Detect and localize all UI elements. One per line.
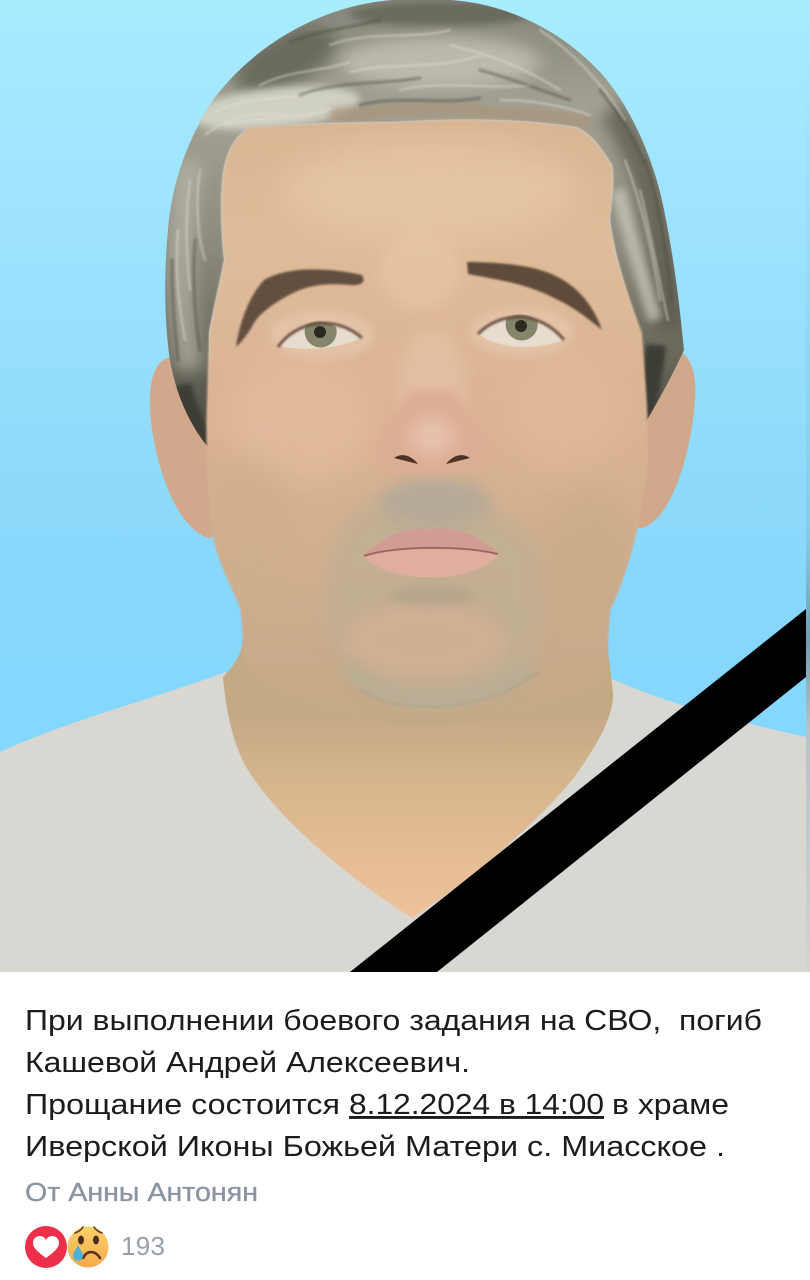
pupil — [515, 320, 527, 332]
line 2: Кашевой Андрей Алексеевич. — [25, 1047, 470, 1079]
right ear — [636, 353, 696, 528]
hair base — [150, 0, 700, 455]
shirt — [0, 672, 810, 972]
reaction count: 193 — [121, 1231, 165, 1261]
emoji face — [68, 1226, 108, 1268]
icon: crying emoji — [68, 1226, 108, 1268]
left nostril — [394, 455, 418, 464]
dark hair strands — [172, 20, 672, 360]
right eye — [93, 1236, 99, 1244]
chin stubble band — [345, 665, 530, 699]
left eyebrow — [236, 269, 364, 347]
under lip shadow — [394, 588, 470, 606]
face — [204, 118, 649, 654]
upper lid — [278, 323, 362, 347]
light top band — [340, 36, 540, 88]
neck — [223, 640, 613, 918]
dark crown top — [350, 2, 530, 26]
author: От Анны Антонян — [25, 1179, 258, 1207]
reactions row — [25, 1226, 165, 1268]
left ear — [150, 357, 219, 538]
lips — [362, 528, 500, 577]
chin pad — [345, 604, 505, 676]
dark crown left — [228, 21, 342, 94]
right eye — [470, 308, 574, 356]
white heart — [33, 1236, 59, 1258]
blue studio background — [0, 0, 810, 972]
face shading — [210, 140, 640, 710]
lower lip — [362, 548, 500, 577]
chin edge — [363, 672, 539, 700]
brown hairline tint — [330, 111, 590, 122]
right jaw tan — [564, 511, 638, 634]
nose — [376, 330, 488, 475]
mouth line — [364, 548, 498, 556]
left side grey — [182, 160, 190, 370]
line 1: При выполнении боевого задания на СВО, погиб — [25, 1005, 762, 1037]
right side light streak — [618, 190, 655, 320]
left eye — [270, 311, 374, 359]
right cheek light — [505, 350, 625, 470]
stubble area — [330, 500, 538, 690]
eye socket highlight — [470, 308, 574, 356]
light hair strands — [177, 30, 668, 340]
date and time: 8.12.2024 в 14:00 — [349, 1089, 604, 1121]
nose tip light — [410, 416, 454, 456]
upper lip — [362, 528, 500, 556]
left cheek light — [254, 434, 342, 458]
eye white — [478, 319, 564, 347]
white left front — [198, 82, 362, 134]
mouth — [83, 1252, 100, 1258]
nose bridge light — [400, 330, 464, 450]
right lower dark — [636, 345, 656, 445]
brow bridge light — [386, 243, 454, 305]
forehead light — [297, 145, 564, 228]
left jaw tan — [213, 535, 240, 605]
line 3 end: в храме — [612, 1089, 729, 1121]
portrait photo — [0, 0, 810, 972]
left eyebrow — [75, 1227, 83, 1233]
left eye — [78, 1236, 84, 1244]
red circle — [25, 1226, 67, 1268]
left lower dark — [182, 385, 208, 450]
hair — [150, 0, 700, 455]
right edge strip — [806, 0, 810, 972]
right eyebrow — [94, 1227, 102, 1233]
line 3 start: Прощание состоится — [25, 1089, 340, 1121]
iris — [305, 321, 337, 347]
eye white — [280, 324, 362, 349]
nose body — [376, 390, 488, 475]
pupil — [314, 326, 326, 338]
mourning ribbon — [350, 609, 806, 972]
upper lid — [478, 317, 564, 340]
tear — [73, 1245, 83, 1261]
upper lip grey stubble — [380, 478, 490, 526]
right eyebrow — [467, 262, 602, 330]
right nostril — [446, 455, 470, 464]
iris — [506, 314, 538, 340]
line 4: Иверской Иконы Божьей Матери с. Миасское . — [25, 1131, 725, 1163]
post text — [25, 1005, 762, 1163]
icon: heart badge — [25, 1226, 67, 1268]
eye socket highlight — [270, 311, 374, 359]
right side dark — [610, 110, 670, 330]
